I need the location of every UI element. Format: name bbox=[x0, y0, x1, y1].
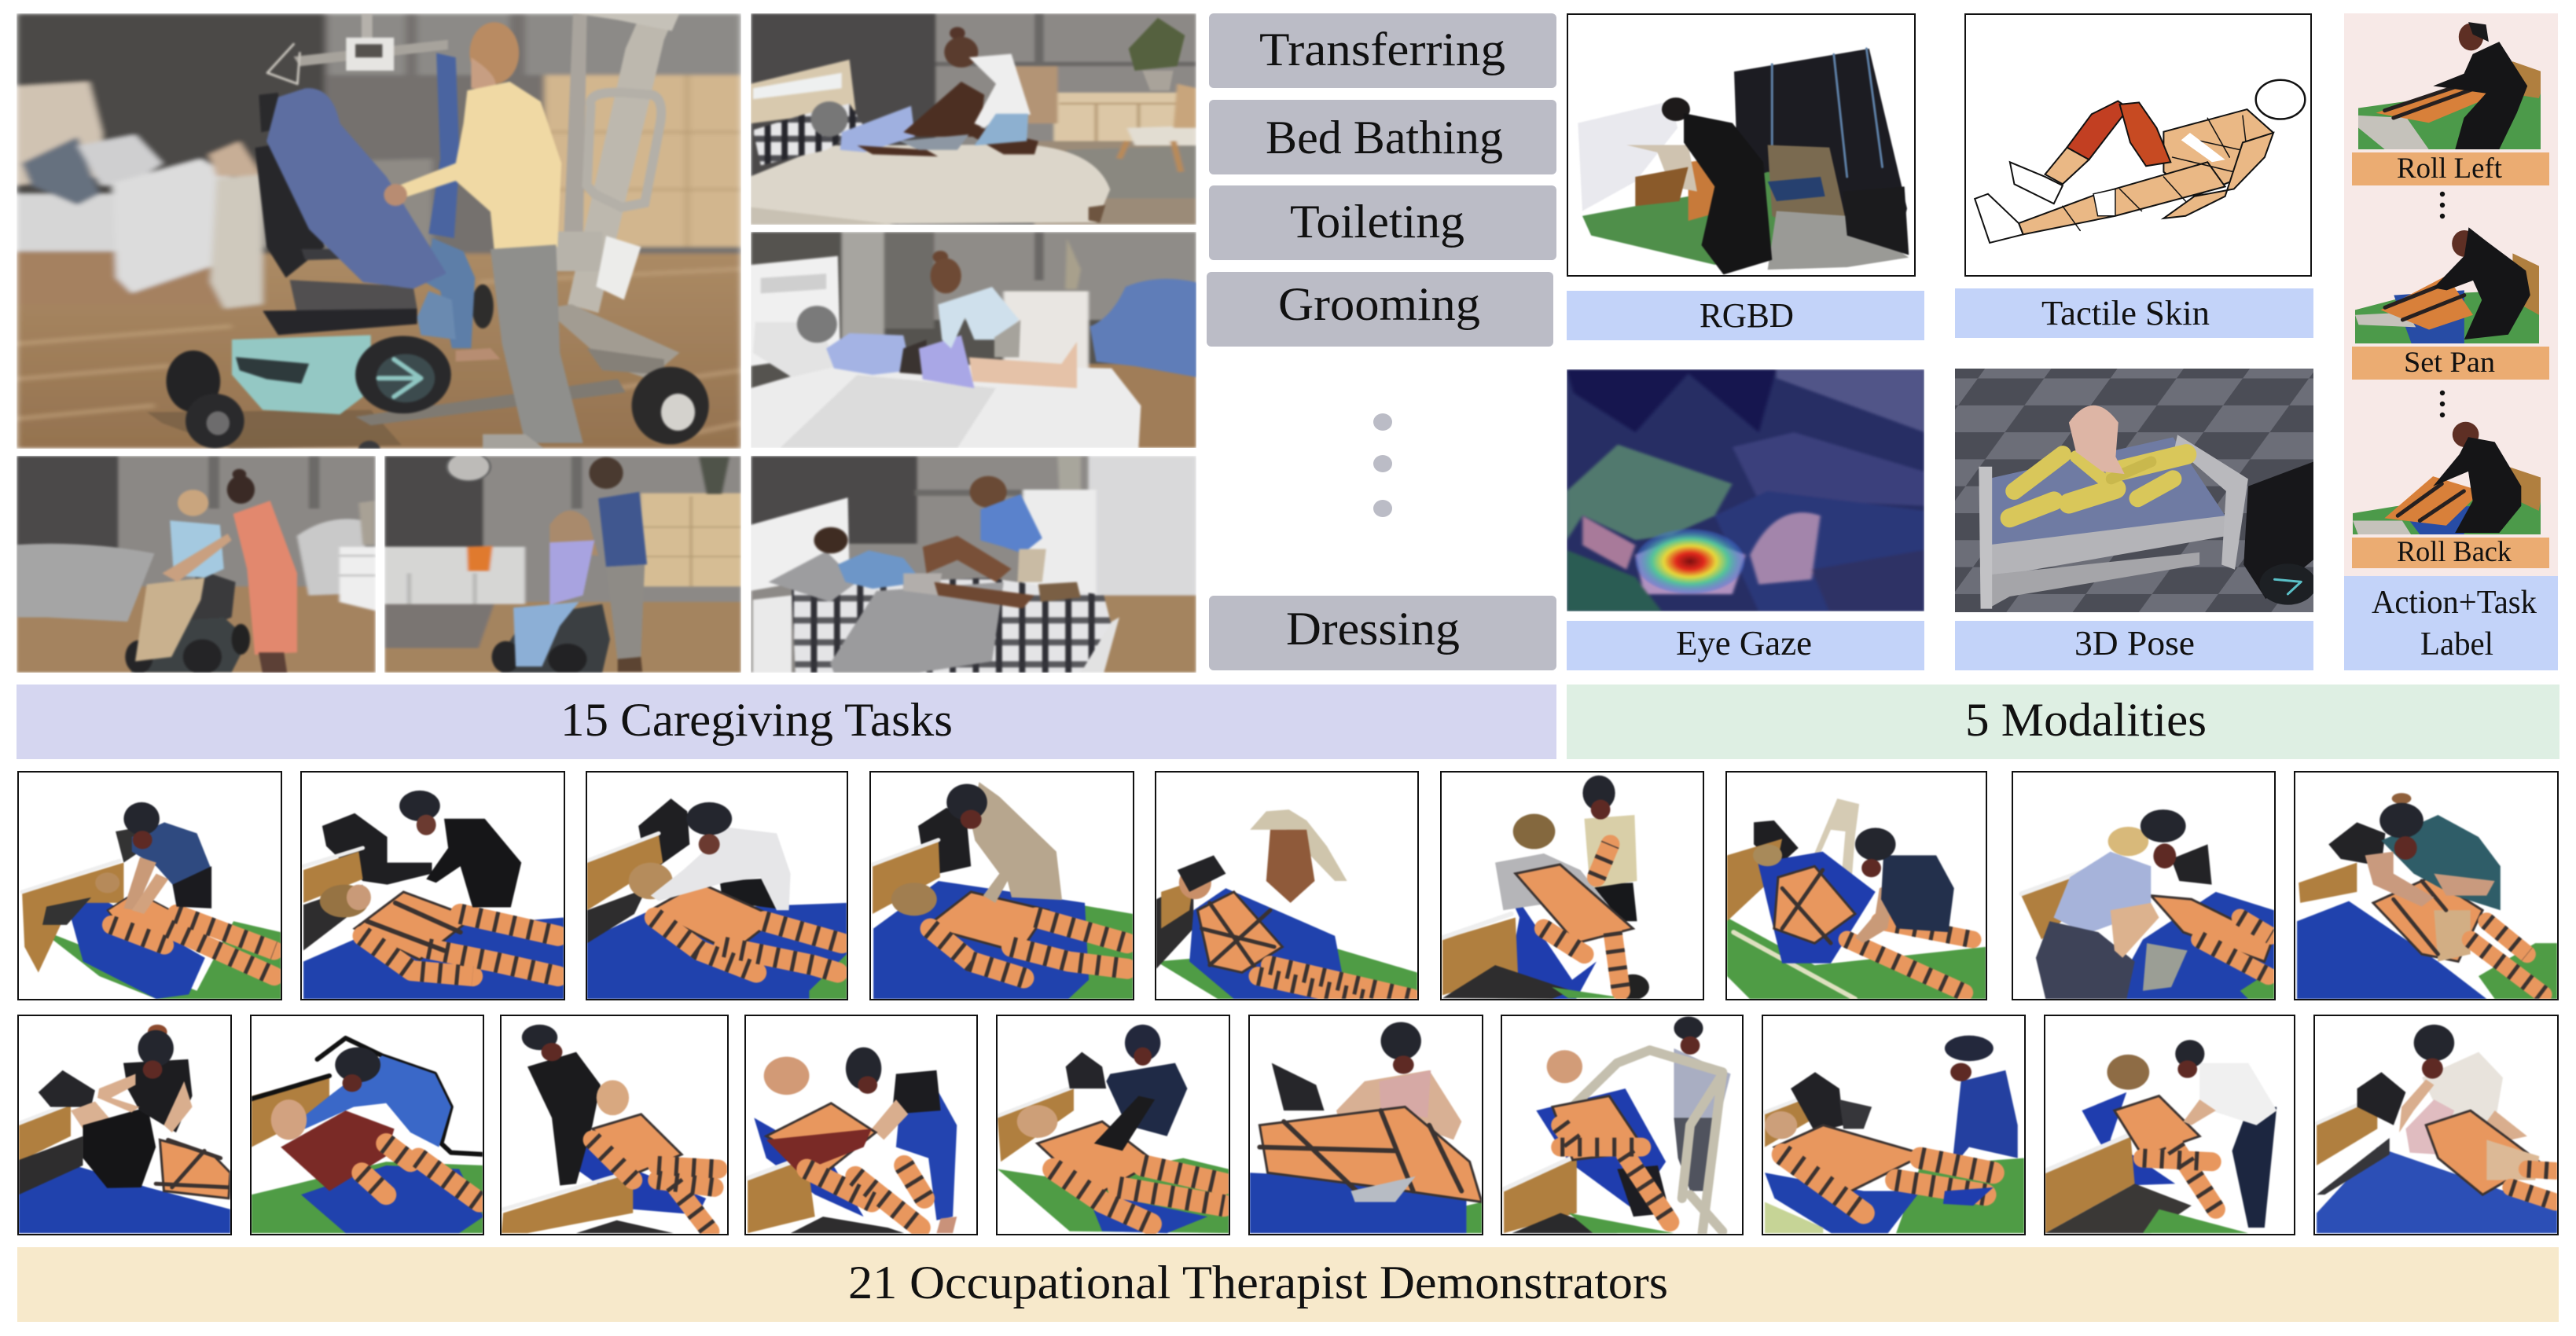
demonstrator photo 14 bbox=[996, 1015, 1230, 1235]
modality label: Action+Task Label: Label bbox=[2420, 626, 2493, 662]
bed bbox=[751, 256, 1141, 448]
modality image: eye gaze heatmap bbox=[1567, 369, 1924, 611]
caregiver brushing hair bbox=[589, 457, 647, 672]
task label: Dressing: Dressing bbox=[1286, 603, 1460, 655]
modality label: RGBD bbox=[1567, 291, 1924, 340]
task label: Grooming bbox=[1207, 272, 1553, 347]
modality label: Tactile Skin: Tactile Skin bbox=[2041, 294, 2210, 332]
demonstrator photo 12 bbox=[500, 1015, 729, 1235]
task label: Bed Bathing: Bed Bathing bbox=[1266, 112, 1503, 163]
modality image: tactile skin diagram bbox=[1964, 13, 2312, 277]
demonstrator photo 16 bbox=[1501, 1015, 1744, 1235]
plaid pillow bbox=[753, 104, 865, 165]
person in black bbox=[1662, 97, 1772, 274]
seated patient bbox=[135, 490, 232, 661]
patient lying bbox=[814, 527, 1034, 608]
grid lines bbox=[2063, 116, 2251, 230]
wheelchair bbox=[125, 569, 250, 674]
patient in blue sling bbox=[266, 53, 501, 362]
demonstrator photo 3 bbox=[586, 771, 848, 1000]
summary band: 15 Caregiving Tasks: 15 Caregiving Tasks bbox=[560, 694, 953, 746]
demonstrator photo 15 bbox=[1248, 1015, 1483, 1235]
vertical ellipsis bbox=[2440, 192, 2445, 218]
mannequin limbs under overlay bbox=[1567, 512, 1924, 611]
room background bbox=[751, 456, 1196, 673]
demonstrator photo 10 bbox=[17, 1015, 232, 1235]
dark screen panels bbox=[1734, 49, 1907, 255]
demonstrator photo 19 bbox=[2313, 1015, 2559, 1235]
modality label: Eye Gaze: Eye Gaze bbox=[1676, 624, 1812, 662]
demonstrator photo 13 bbox=[744, 1015, 978, 1235]
modality image: 3D pose simulation bbox=[1955, 369, 2313, 612]
demonstrator photo 1 bbox=[17, 771, 282, 1000]
far thigh and shin pressure sensors bbox=[2045, 101, 2170, 184]
photo: grooming scene with wheelchair bbox=[384, 456, 741, 673]
panel: action sequence timeline bbox=[2344, 13, 2558, 576]
near foot bbox=[1975, 194, 2023, 243]
demonstrator photo 2 bbox=[300, 771, 565, 1000]
modality label: 3D Pose: 3D Pose bbox=[2074, 624, 2195, 662]
modality label: Action+Task Label: Action+Task bbox=[2372, 585, 2537, 621]
yellow capsule body bbox=[2010, 454, 2186, 518]
bed with plaid bbox=[751, 497, 1119, 673]
vertical ellipsis bbox=[2440, 390, 2445, 418]
action label: Roll Left bbox=[2352, 152, 2549, 185]
photo: caregiver transferring patient with mechanical lift bbox=[17, 13, 741, 449]
action frame: set pan bbox=[2355, 227, 2539, 343]
task label: Transferring bbox=[1209, 13, 1556, 88]
near leg bbox=[2019, 162, 2225, 234]
power wheelchair bbox=[166, 93, 451, 463]
action frame: roll left bbox=[2358, 22, 2541, 149]
patient lying bbox=[797, 306, 1077, 388]
modality label: RGBD: RGBD bbox=[1700, 296, 1794, 335]
gaze heatmap bbox=[1635, 529, 1744, 594]
room background bbox=[17, 456, 376, 673]
action label: Set Pan bbox=[2352, 347, 2549, 380]
modality label: Eye Gaze bbox=[1567, 621, 1924, 670]
action label: Roll Back bbox=[2352, 538, 2549, 568]
lift wheel bbox=[632, 367, 709, 444]
ellipsis dots bbox=[1373, 413, 1392, 517]
head bbox=[2256, 80, 2305, 119]
modality label: Tactile Skin bbox=[1955, 288, 2313, 338]
demonstrator photo 8 bbox=[2012, 771, 2276, 1000]
patient lying bbox=[811, 82, 1038, 156]
action label: Roll Left: Roll Left bbox=[2397, 152, 2503, 185]
photo: toileting scene bbox=[751, 232, 1196, 448]
caregiver bbox=[970, 476, 1046, 582]
summary band: 21 Occupational Therapist Demonstrators bbox=[17, 1247, 2559, 1322]
plant bbox=[1129, 18, 1185, 90]
supply basket bbox=[1038, 582, 1081, 602]
summary band: 5 Modalities: 5 Modalities bbox=[1965, 694, 2207, 746]
wheelchair bbox=[492, 604, 610, 674]
torso bbox=[2163, 109, 2273, 196]
demonstrator photo 7 bbox=[1725, 771, 1987, 1000]
demonstrator photo 9 bbox=[2294, 771, 2559, 1000]
sheet and bed bbox=[1578, 101, 1847, 265]
blanket on bed bbox=[17, 544, 155, 622]
head bbox=[2069, 406, 2125, 474]
summary band: 5 Modalities bbox=[1567, 685, 2559, 759]
demonstrator photo 18 bbox=[2044, 1015, 2295, 1235]
task label: Bed Bathing bbox=[1209, 100, 1556, 174]
hospital bed bbox=[1979, 435, 2248, 609]
caregiver bbox=[944, 27, 1031, 145]
action label: Set Pan: Set Pan bbox=[2404, 347, 2495, 379]
demonstrator photo 6 bbox=[1440, 771, 1704, 1000]
photo: bed bathing scene bbox=[751, 13, 1196, 225]
demonstrator photo 5 bbox=[1155, 771, 1419, 1000]
summary band: 15 Caregiving Tasks bbox=[17, 685, 1556, 759]
room background bbox=[17, 13, 741, 449]
floor and wheelchair bbox=[1768, 211, 1909, 270]
action frame: roll back bbox=[2353, 421, 2541, 534]
background tones bbox=[1567, 369, 1924, 611]
caregiver in yellow sweater bbox=[384, 22, 583, 449]
modality label: Action+Task Label bbox=[2344, 576, 2558, 670]
room background bbox=[384, 456, 741, 673]
white chest gap bbox=[2181, 133, 2225, 162]
caregiver bbox=[931, 251, 1020, 358]
armchair bbox=[1090, 279, 1196, 377]
caregiver in coral dress bbox=[227, 469, 297, 673]
task label: Toileting: Toileting bbox=[1290, 196, 1464, 248]
far foot bbox=[2010, 162, 2063, 204]
modality image: RGBD point cloud bbox=[1567, 13, 1916, 277]
demonstrator photo 17 bbox=[1762, 1015, 2026, 1235]
task label: Dressing bbox=[1209, 596, 1556, 670]
photo: bed scene with plaid sheets bbox=[751, 456, 1196, 673]
task label: Transferring: Transferring bbox=[1259, 24, 1505, 75]
room background bbox=[751, 13, 1196, 225]
modality label: 3D Pose bbox=[1955, 621, 2313, 670]
room background bbox=[751, 232, 1196, 448]
task label: Toileting bbox=[1209, 185, 1556, 260]
summary band: 21 Occupational Therapist Demonstrators: 21 Occupational Therapist Demonstrators bbox=[848, 1257, 1668, 1308]
demonstrator photo 11 bbox=[250, 1015, 484, 1235]
wheelchair bbox=[2243, 462, 2316, 605]
arm bbox=[2163, 133, 2273, 218]
bed bbox=[751, 60, 1110, 225]
seated patient bbox=[513, 511, 598, 666]
photo: feeding / shoulder scene with wheelchair bbox=[17, 456, 376, 673]
task label: Grooming: Grooming bbox=[1278, 278, 1480, 330]
floor shadow bbox=[147, 410, 402, 449]
wall clock bbox=[447, 453, 491, 481]
demonstrator photo 4 bbox=[869, 771, 1134, 1000]
patient lift frame bbox=[267, 13, 679, 425]
